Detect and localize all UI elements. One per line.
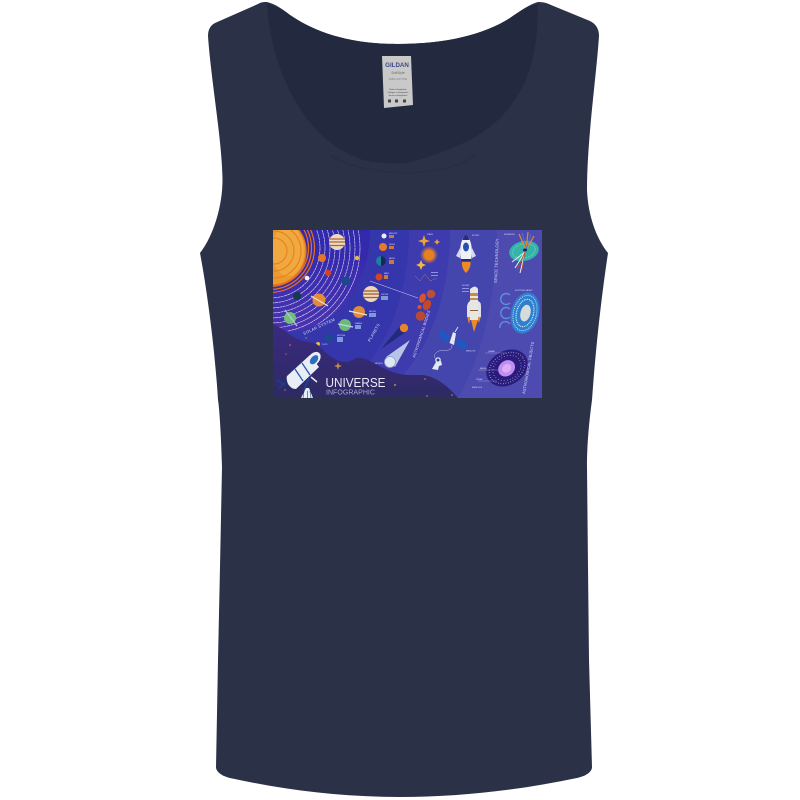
planet labels <box>322 233 398 346</box>
white rocket <box>456 234 480 273</box>
purple galaxy labels: PULSAR <box>476 378 483 381</box>
garment neck label: Made in Bangladesh <box>389 89 407 91</box>
multi-stage rocket <box>462 285 481 332</box>
subtitle: INFOGRAPHIC: INFOGRAPHIC <box>326 390 375 396</box>
garment neck label: Fabriqué au Bangladesh <box>388 91 408 94</box>
title: UNIVERSE: UNIVERSE <box>326 376 386 390</box>
satellite: SATELLITE <box>466 350 476 352</box>
solar system heading: SOLAR SYSTEM <box>302 317 336 336</box>
galaxy gauges <box>500 294 510 328</box>
background band: planets <box>273 230 409 398</box>
comet white <box>384 340 410 368</box>
solar system planets <box>284 234 359 326</box>
purple galaxy labels: BLACK HOLE <box>472 386 482 389</box>
garment neck label: Hecho en Bangladesh <box>389 95 407 97</box>
background band: astronomical objects <box>458 230 542 398</box>
shirt front silhouette <box>200 2 608 797</box>
planet labels: MARS <box>384 272 390 275</box>
planet labels: SATURN <box>369 310 377 313</box>
orbit rings <box>273 230 360 332</box>
planets pointer line <box>370 281 418 298</box>
planets column <box>316 234 387 346</box>
tank top product image <box>200 2 608 797</box>
purple galaxy <box>486 350 528 386</box>
planet labels: URANUS <box>355 322 363 325</box>
astronomical bodies heading: ASTRONOMICAL BODIES <box>411 309 431 358</box>
decorative orange stars <box>284 337 453 397</box>
comet label: METEOR <box>375 363 383 365</box>
telescope <box>277 349 323 398</box>
garment neck label: 100% COTTON <box>389 77 407 81</box>
garment neck label: GILDAN <box>385 62 409 69</box>
wormhole <box>504 232 541 273</box>
purple galaxy labels: QUASAR <box>488 350 496 353</box>
satellite <box>438 327 476 352</box>
astronomical bodies: stars and sun <box>415 233 440 281</box>
background band: astronomical bodies <box>370 230 450 374</box>
background band: space technology <box>404 236 496 396</box>
planet labels: VENUS <box>389 244 396 246</box>
planet labels: NEPTUNE <box>337 335 346 337</box>
garment neck label <box>382 56 413 108</box>
wormhole: WORMHOLE <box>504 234 516 236</box>
space technology heading: SPACE TECHNOLOGY <box>493 238 500 283</box>
astronaut with tether <box>432 345 452 370</box>
dark wave landscape <box>273 323 458 398</box>
planet labels: EARTH <box>389 257 395 260</box>
garment neck label: SoftStyle <box>391 71 405 75</box>
sun <box>273 230 316 293</box>
spiral galaxy <box>510 290 540 334</box>
astronomical bodies: stars and sun: STARS <box>427 233 434 236</box>
astronomical objects heading: ASTRONOMICAL OBJECTS <box>521 341 535 394</box>
comet orange <box>381 324 408 349</box>
multi-stage rocket: ROCKET <box>462 285 470 287</box>
background band: solar system <box>273 230 370 332</box>
planet labels: JUPITER <box>381 294 389 296</box>
white rocket: ROCKET <box>472 235 480 237</box>
printed universe infographic panel <box>273 230 542 398</box>
planets heading: PLANETS <box>367 322 381 342</box>
planet labels: PLUTO <box>322 344 328 346</box>
inner neck shading <box>267 4 538 163</box>
purple galaxy labels <box>472 350 506 389</box>
astronomical bodies: asteroids <box>416 290 435 321</box>
spiral galaxy: ELLIPTICAL GALAXY <box>515 289 533 292</box>
planet labels: MERCURY <box>389 233 398 235</box>
purple galaxy labels: NEBULA <box>480 367 487 370</box>
neck collar seam shading <box>330 155 475 173</box>
